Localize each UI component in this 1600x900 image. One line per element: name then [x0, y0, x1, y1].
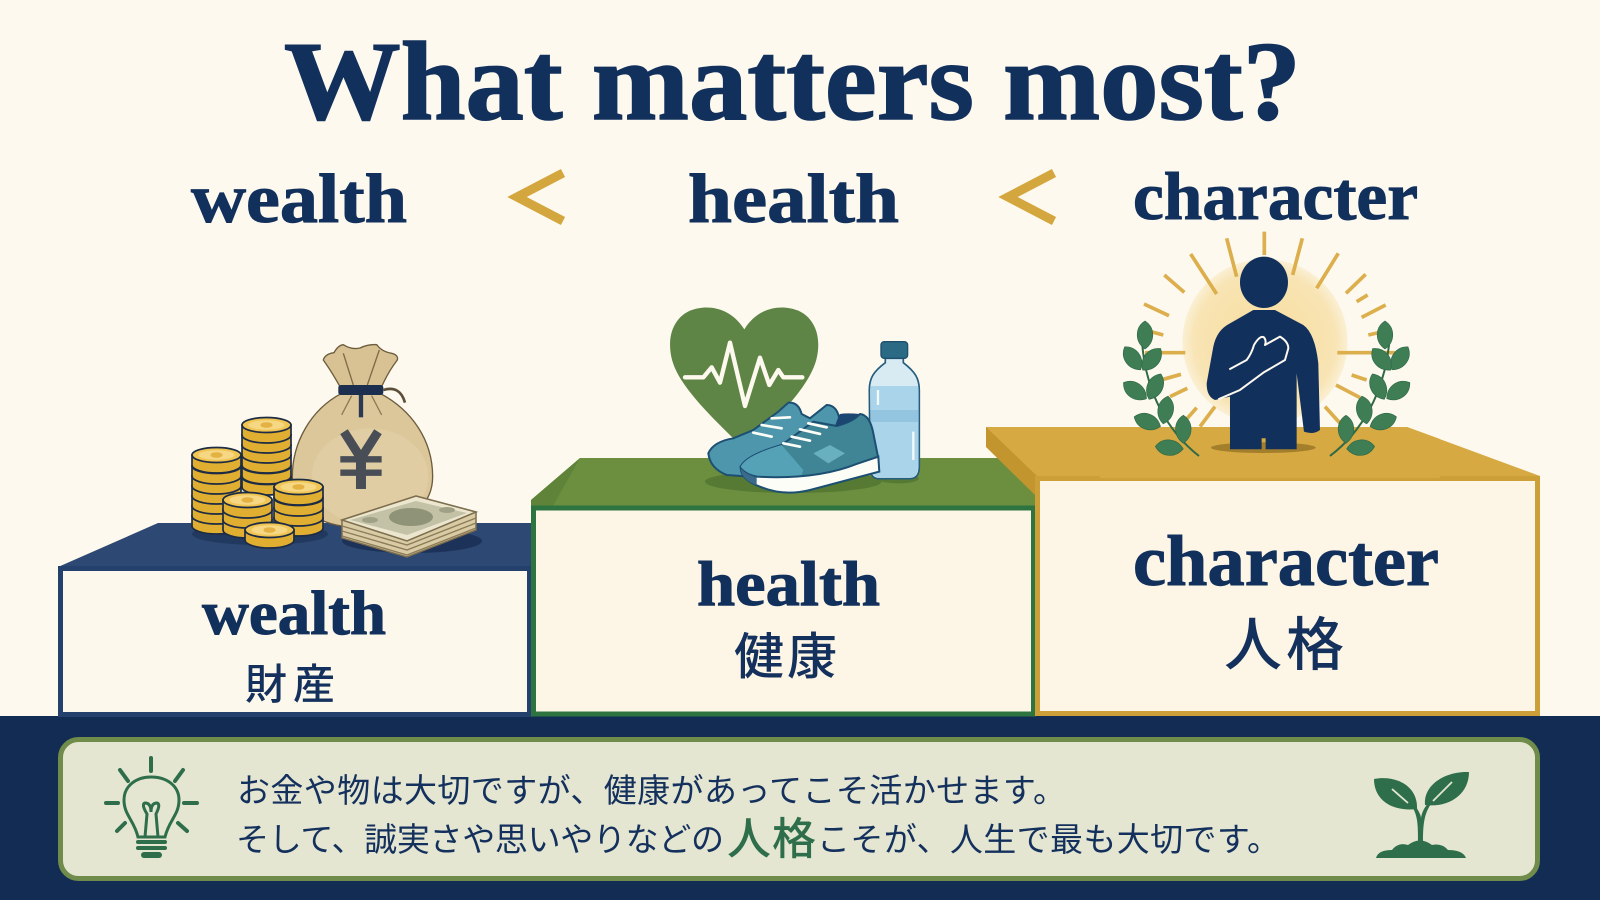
podium top overlap [1100, 427, 1440, 478]
character japanese label: 人格 [1224, 613, 1348, 678]
label: character: character [1133, 158, 1418, 234]
icon: money bag [292, 345, 433, 527]
title: What matters most? [284, 20, 1301, 144]
icon: money bag, coins and cash [192, 345, 482, 557]
icon: left laurel [1118, 321, 1199, 457]
footer band [0, 716, 1600, 900]
callout panel [60, 740, 1538, 878]
health label: health [697, 548, 880, 619]
icon: water bottle [869, 342, 919, 483]
icon: heart, running shoes and water bottle [670, 307, 919, 493]
icon: back shoe [708, 403, 850, 477]
text: message line 2 end: こそが、人生で最も大切です。 [817, 821, 1280, 858]
icon: front shoe [741, 413, 879, 493]
icon: stack of banknotes [342, 496, 482, 557]
arrow: less than 1 [517, 173, 563, 221]
arrow: less than 2 [1008, 173, 1054, 221]
ranking row [191, 158, 1418, 238]
wealth label: wealth [202, 580, 386, 648]
icon: heart with pulse [670, 307, 818, 450]
icon: light bulb [106, 758, 197, 855]
icon: coin stacks [192, 418, 328, 548]
icon: person silhouette [1207, 257, 1320, 449]
panel: health podium [531, 458, 1045, 714]
shoe shadow [705, 470, 882, 493]
icon: right laurel [1330, 321, 1414, 457]
label: wealth: wealth [191, 161, 407, 238]
icon: sprout [1374, 772, 1469, 858]
person shadow [1211, 442, 1316, 453]
character label: character [1133, 521, 1439, 601]
text: message line 2: そして、誠実さや思いやりなどの [236, 821, 724, 858]
label: health: health [688, 161, 899, 238]
wealth japanese label: 財産 [245, 661, 341, 708]
text: message line 1: お金や物は大切ですが、健康があってこそ活かせます。 [237, 772, 1066, 809]
panel: wealth podium [58, 523, 531, 714]
icon: sun glow [1182, 259, 1348, 424]
panel: character podium [986, 427, 1540, 714]
icon: sun rays [1138, 232, 1395, 427]
icon: person with hand on heart, sun and laurel [1100, 232, 1440, 478]
text: emphasized word: 人格 [727, 815, 816, 864]
health japanese label: 健康 [734, 629, 840, 685]
